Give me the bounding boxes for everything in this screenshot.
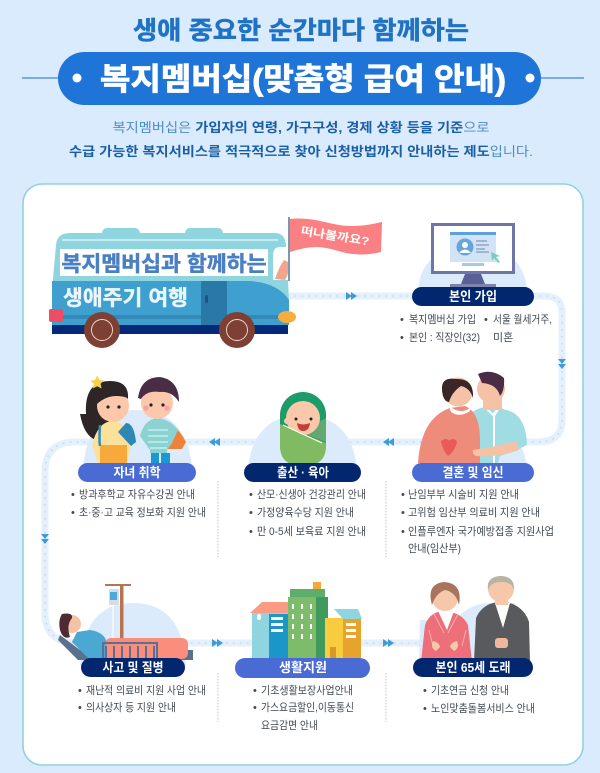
list: join	[400, 313, 552, 344]
bus slogan: 복지멤버십과 함께하는	[62, 253, 266, 276]
list: birth: •	[249, 526, 253, 538]
route path	[45, 296, 562, 643]
step: birth: 출산 · 육아	[277, 465, 329, 480]
step: age 65: 본인 65세 도래	[436, 660, 510, 675]
list: birth: •	[249, 507, 253, 519]
list: accident: •	[78, 702, 82, 714]
list: marriage: •	[401, 489, 405, 501]
intro text: 복지멤버십은 가입자의 연령, 가구구성, 경제 상황 등을 기준 으로	[112, 120, 490, 135]
list: marriage: 고위험 임산부 의료비 지원 안내	[408, 506, 540, 519]
icon: woman	[418, 378, 519, 463]
icon: swaddled baby	[280, 392, 326, 467]
list: children: 초·중·고 교육 정보화 지원 안내	[79, 506, 206, 519]
list: living support: 요금감면 안내	[261, 719, 318, 732]
list: children	[71, 488, 206, 519]
list: living support: 가스요금할인,이동통신	[261, 701, 354, 714]
list: age 65: •	[423, 685, 427, 697]
list: join: 본인 : 직장인(32)	[409, 331, 480, 344]
list: children: •	[71, 507, 75, 519]
list: age 65: •	[423, 703, 427, 715]
heading banner: 복지멤버십(맞춤형 급여 안내)	[100, 62, 506, 97]
step: living support: 생활지원	[279, 660, 327, 675]
list: birth: 가정양육수당 지원 안내	[257, 506, 354, 519]
step: children	[78, 375, 196, 482]
route arrows	[41, 292, 566, 647]
list: join: •	[484, 314, 488, 326]
intro text	[69, 120, 533, 159]
list: marriage: 안내(임산부)	[408, 542, 461, 555]
list: join: 서울 월세거주,	[493, 313, 552, 326]
icon: bus with flag	[49, 217, 382, 348]
list: age 65: 노인맞춤돌봄서비스 안내	[431, 702, 535, 715]
list: join: 복지멤버십 가입	[409, 313, 476, 326]
flag text: 떠나볼까요?	[300, 224, 370, 248]
step: age 65	[413, 576, 533, 677]
step: children: 자녀 취학	[114, 465, 161, 480]
list: marriage: 인플루엔자 국가예방접종 지원사업	[408, 525, 554, 538]
icon: computer monitor	[431, 223, 515, 288]
step: marriage: 결혼 및 임신	[442, 465, 504, 480]
list: marriage	[401, 488, 554, 555]
icon: boy	[138, 377, 186, 465]
icon: buildings	[250, 582, 362, 658]
step: join: 본인 가입	[449, 289, 497, 304]
icon: senior woman	[421, 582, 472, 662]
heading banner	[58, 52, 541, 105]
list: birth: 산모·신생아 건강관리 안내	[257, 488, 366, 501]
list: birth: •	[249, 489, 253, 501]
intro text: 수급 가능한 복지서비스를 적극적으로 찾아 신청방법까지 안내하는 제도 입니다.	[69, 144, 533, 159]
list: marriage: •	[401, 526, 405, 538]
list: join: •	[400, 332, 404, 344]
step: birth	[244, 392, 361, 482]
step: living support	[235, 582, 370, 678]
list: birth: 만 0-5세 보육료 지원 안내	[257, 525, 366, 538]
list: living support: 기초생활보장사업안내	[261, 683, 353, 697]
step: accident	[58, 584, 193, 677]
icon: girl	[80, 375, 136, 464]
list: accident: 재난적 의료비 지원 사업 안내	[86, 684, 206, 697]
list: accident: 의사상자 등 지원 안내	[86, 701, 176, 714]
list: join: 미혼	[493, 331, 513, 344]
list: age 65	[423, 684, 535, 715]
list: children: 방과후학교 자유수강권 안내	[79, 488, 195, 501]
title: 생애 중요한 순간마다 함께하는	[133, 17, 469, 45]
bus slogan line 2: 생애주기 여행	[63, 287, 188, 310]
list: accident	[78, 684, 206, 714]
list: living support: •	[253, 685, 257, 697]
list: marriage: 난임부부 시술비 지원 안내	[408, 488, 519, 501]
step: marriage	[412, 372, 534, 482]
step: accident: 사고 및 질병	[102, 660, 164, 675]
list: birth	[249, 488, 366, 538]
step: join	[412, 223, 534, 306]
list: marriage: •	[401, 507, 405, 519]
main panel	[23, 184, 583, 765]
list: accident: •	[78, 685, 82, 697]
icon: man	[472, 372, 527, 463]
icon: senior man	[474, 576, 530, 662]
list: age 65: 기초연금 신청 안내	[431, 684, 509, 697]
icon: patient in bed	[58, 584, 193, 660]
list: children: •	[71, 489, 75, 501]
list: living support: •	[253, 702, 257, 714]
list: join: •	[400, 314, 404, 326]
list: living support	[253, 683, 354, 732]
